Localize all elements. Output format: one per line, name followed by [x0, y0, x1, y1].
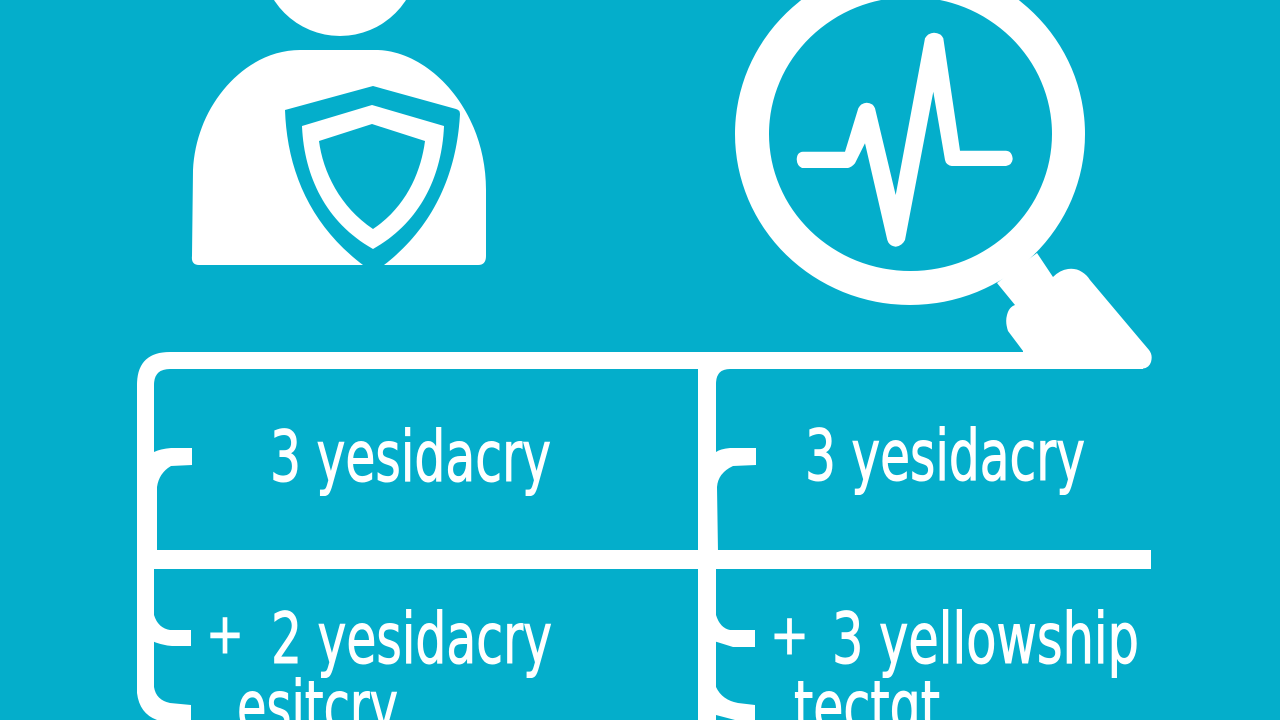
- person body: [192, 50, 486, 265]
- first line: 3 yellowship: [832, 598, 1139, 680]
- plus sign: +: [206, 602, 244, 667]
- shield outer outline: [285, 86, 460, 265]
- table frame lines: [137, 352, 1151, 720]
- shield centre: [319, 124, 425, 229]
- cell: bottom right: [770, 598, 1139, 720]
- cell: top left: 3 yesidacry: [270, 416, 551, 498]
- pulse line: [797, 33, 1013, 247]
- person head: [262, 0, 418, 36]
- cell: top right: 3 yesidacry: [805, 415, 1085, 497]
- magnifier ring: [735, 0, 1085, 305]
- magnifier handle: [997, 253, 1152, 368]
- icon: magnifying glass with pulse line: [735, 0, 1152, 368]
- plus sign: +: [770, 603, 809, 668]
- cell: bottom left: [206, 598, 552, 720]
- icon: person with shield: [192, 0, 486, 265]
- first line: 2 yesidacry: [271, 598, 552, 680]
- shield white band: [302, 105, 444, 249]
